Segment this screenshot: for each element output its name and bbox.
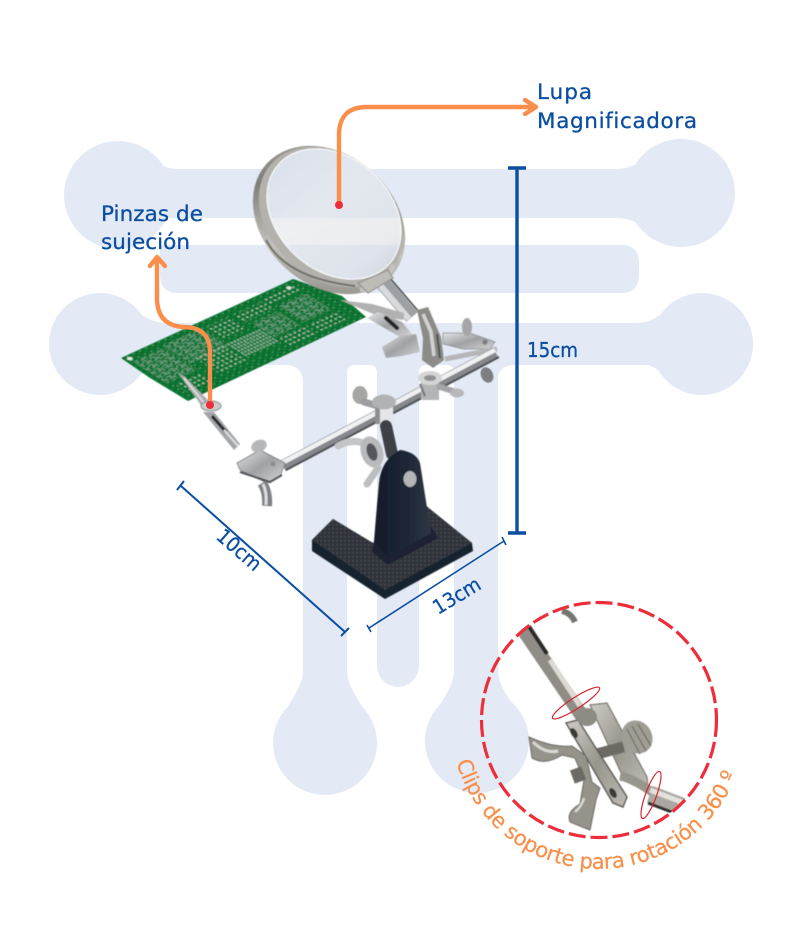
right crocodile clip bbox=[340, 300, 412, 337]
dimension: 15cm: 15cm bbox=[527, 338, 578, 362]
centre post and wing nut bbox=[338, 386, 396, 484]
left joint clamp bbox=[237, 437, 285, 506]
left crocodile clip bbox=[179, 374, 240, 450]
inset: rotation clip detail bbox=[482, 602, 716, 838]
magnifying lens bbox=[252, 145, 406, 295]
label: Pinzas de sujeción: Pinzas de bbox=[101, 202, 203, 227]
dimension: 10cm: 10cm bbox=[212, 524, 267, 576]
arrow: clip to label bbox=[150, 257, 214, 409]
rotation rings bbox=[550, 683, 665, 820]
label: Lupa Magnificadora bbox=[537, 80, 697, 134]
label: Lupa Magnificadora: Lupa bbox=[537, 80, 592, 105]
PCB board bbox=[121, 276, 371, 401]
label: Pinzas de sujeción: sujeción bbox=[101, 230, 190, 255]
magnifier neck bbox=[358, 270, 419, 319]
label: Pinzas de sujeción bbox=[101, 202, 203, 255]
dimension: 13cm: 13cm bbox=[428, 572, 485, 619]
cast iron base bbox=[312, 505, 473, 599]
horizontal arm rod bbox=[282, 350, 499, 470]
background logo watermark bbox=[49, 139, 753, 795]
inset photo bbox=[520, 611, 692, 830]
rod joint clamp bbox=[418, 371, 464, 400]
dimension: 15cm bbox=[508, 168, 578, 533]
central right clamp cluster bbox=[382, 307, 497, 385]
arrow: lens to label bbox=[335, 100, 536, 209]
product photo: helping-hands stand bbox=[121, 115, 499, 599]
dashed circle bbox=[482, 602, 716, 838]
dimension: 13cm bbox=[367, 537, 506, 632]
stand tower bbox=[374, 450, 431, 558]
dimension: 10cm bbox=[177, 481, 349, 636]
label: Lupa Magnificadora: Magnificadora bbox=[537, 109, 697, 134]
curved caption: Clips de soporte para rotación 360 º bbox=[458, 760, 732, 873]
